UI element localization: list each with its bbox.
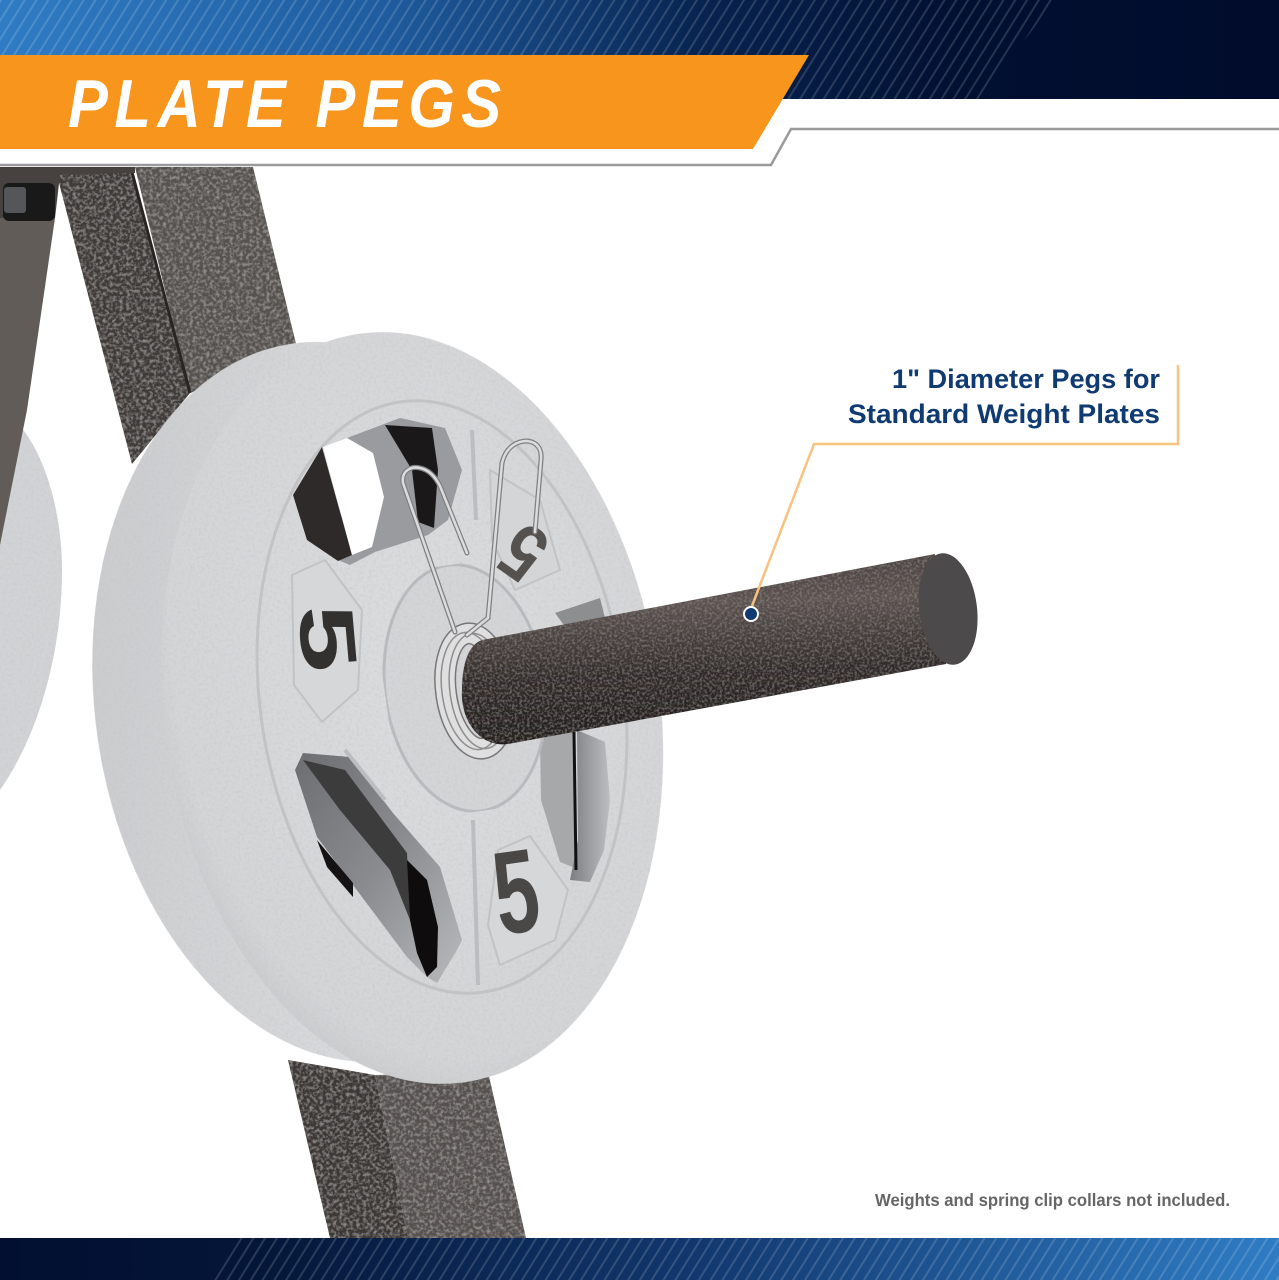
plate grip window: right bbox=[540, 598, 610, 882]
plate number 5 bottom: 5 bbox=[485, 824, 547, 961]
plate back edge bbox=[47, 309, 639, 1095]
footnote: Weights and spring clip collars not included. bbox=[875, 1190, 1230, 1210]
upper rack frame post bbox=[0, 167, 298, 545]
callout text bbox=[848, 364, 1160, 429]
spring clip collar bbox=[403, 441, 541, 754]
icon: frame bolt bbox=[3, 183, 55, 221]
white sweep below the banner bbox=[0, 99, 1279, 165]
plate front face bbox=[114, 299, 710, 1117]
banner grey accent line bbox=[0, 129, 1279, 165]
plate number 5 top: 5 bbox=[483, 505, 564, 599]
plate inner ring bbox=[220, 377, 664, 1017]
peg bbox=[462, 550, 984, 744]
callout text: 1" Diameter Pegs for bbox=[892, 364, 1160, 394]
plate panel top bbox=[490, 470, 560, 590]
orange title banner bbox=[0, 55, 809, 149]
callout dot on peg bbox=[744, 607, 758, 621]
callout leader line bbox=[752, 365, 1178, 606]
callout text: Standard Weight Plates bbox=[848, 399, 1160, 429]
top banner band bbox=[0, 0, 1279, 99]
bottom band bbox=[0, 1238, 1279, 1280]
plate panel left bbox=[292, 560, 362, 722]
plate spoke seams bbox=[345, 430, 478, 985]
plate grip window: lower left bbox=[295, 753, 462, 983]
peg end cap bbox=[912, 550, 984, 668]
lower rack frame post bbox=[288, 1060, 526, 1238]
title: PLATE PEGS bbox=[68, 65, 508, 142]
weight plate bbox=[47, 299, 710, 1117]
rear weight plate bbox=[0, 412, 62, 790]
plate grip window: upper left bbox=[293, 418, 462, 565]
plate number 5 left: 5 bbox=[281, 601, 374, 675]
plate hub bbox=[369, 554, 561, 822]
plate panel bottom bbox=[488, 836, 568, 965]
